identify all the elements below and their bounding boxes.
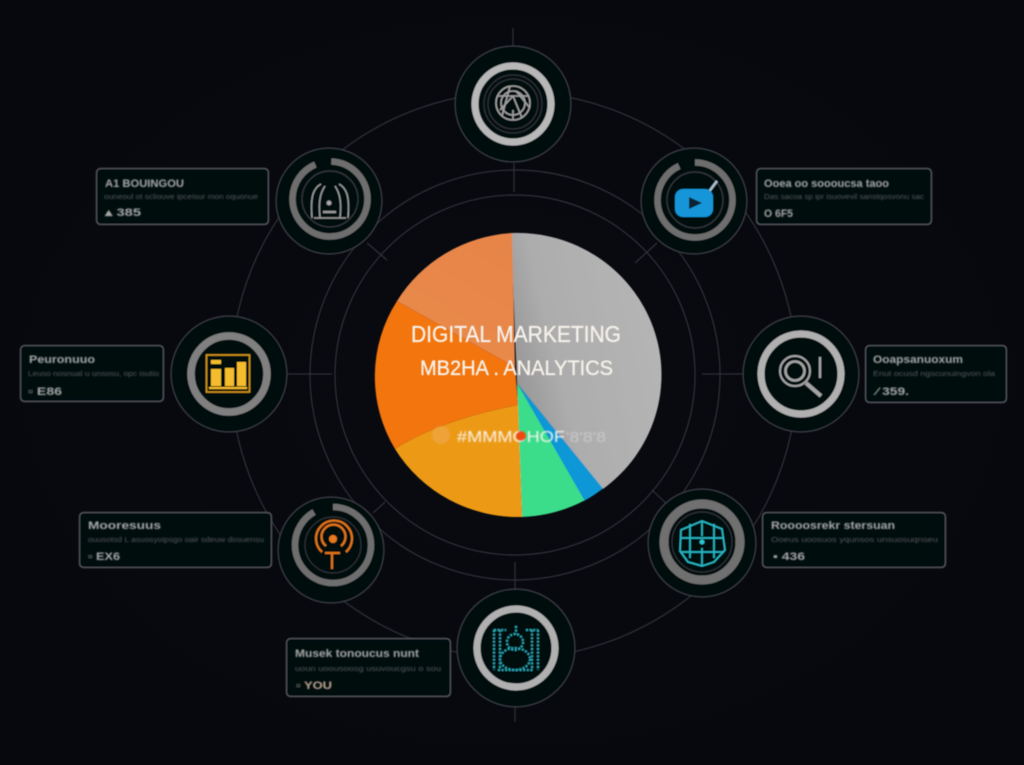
node: right: [743, 316, 859, 432]
slice: gray: [511, 233, 662, 489]
description: Ooeus uoosuos yqunsos unsuosuqnseu: [771, 537, 938, 544]
panel: top right: [756, 168, 932, 224]
node: bottom: [457, 589, 575, 707]
node: bottom right: [648, 489, 756, 597]
value: ▴ 385: [104, 207, 141, 219]
node: top right: [641, 148, 747, 254]
panel: right: [866, 346, 1006, 402]
panel: bottom left: [80, 512, 272, 568]
panel: top left: [96, 168, 268, 224]
pie subtitle: '8'8'8: [566, 429, 606, 446]
icon: bar chart: [206, 355, 250, 392]
value: ▫ YOU: [296, 680, 332, 692]
icon: shield globe: [496, 86, 530, 120]
value: ▪ 436: [773, 551, 805, 563]
icon: magnifier: [780, 356, 821, 396]
icon: dome: [311, 184, 349, 218]
slice: blue: [517, 383, 603, 501]
slice: amber: [395, 405, 522, 517]
node: top: [455, 46, 571, 162]
description: Leuso nosnual u unsosu, opc isutio: [28, 371, 159, 378]
slice: orange: [375, 301, 518, 449]
icon: video play: [675, 181, 717, 217]
title line 2: MB2HA . ANALYTICS: [420, 357, 613, 380]
node: bottom left: [278, 497, 384, 603]
heading: Peuronuuo: [29, 354, 95, 366]
pie subtitle: #MMMOHOF: [457, 429, 565, 446]
value: ⁄ 359.: [872, 386, 909, 398]
title line 1: DIGITAL MARKETING: [411, 321, 621, 347]
heading: Ooapsanuoxum: [873, 354, 963, 366]
value: ▫ E86: [28, 386, 62, 398]
center pie chart: [375, 233, 662, 517]
pie title: [411, 321, 621, 446]
slice: green: [517, 383, 584, 517]
heading: Musek tonoucus nunt: [295, 648, 419, 660]
icon: cyan polyhedron: [680, 521, 725, 566]
description: Enut ocusd ngscunuingvon ola: [873, 371, 995, 378]
description: Das sacoa sp ipr isuovevil sanstqosvonu sac: [764, 194, 925, 201]
panel: left: [20, 346, 164, 402]
slice: light orange: [397, 233, 515, 367]
heading: Roooosrekr stersuan: [771, 520, 895, 532]
value: ▫ EX6: [88, 551, 120, 563]
panel: bottom right: [762, 512, 946, 568]
panel: bottom: [286, 638, 450, 696]
icon: cyan figure: [494, 626, 538, 670]
description: uoun uoousoosg usuvoucgsu o sou: [295, 666, 441, 673]
value: O 6F5: [764, 208, 793, 220]
orbit rings and connectors: [231, 28, 797, 722]
node: top left: [276, 148, 382, 254]
description: ouneoul ot scliouve ipceisur mon oquonue: [104, 194, 258, 201]
heading: Ooea oo soooucsa taoo: [764, 178, 889, 190]
pie subtitle: [432, 426, 606, 446]
node: left: [171, 316, 287, 432]
description: ouusotsd L asuosyoipsgo oair sdeuw dosuensu: [88, 537, 264, 544]
heading: A1 BOUINGOU: [105, 178, 184, 190]
heading: Mooresuus: [88, 520, 161, 532]
icon: orange signal: [316, 521, 352, 569]
